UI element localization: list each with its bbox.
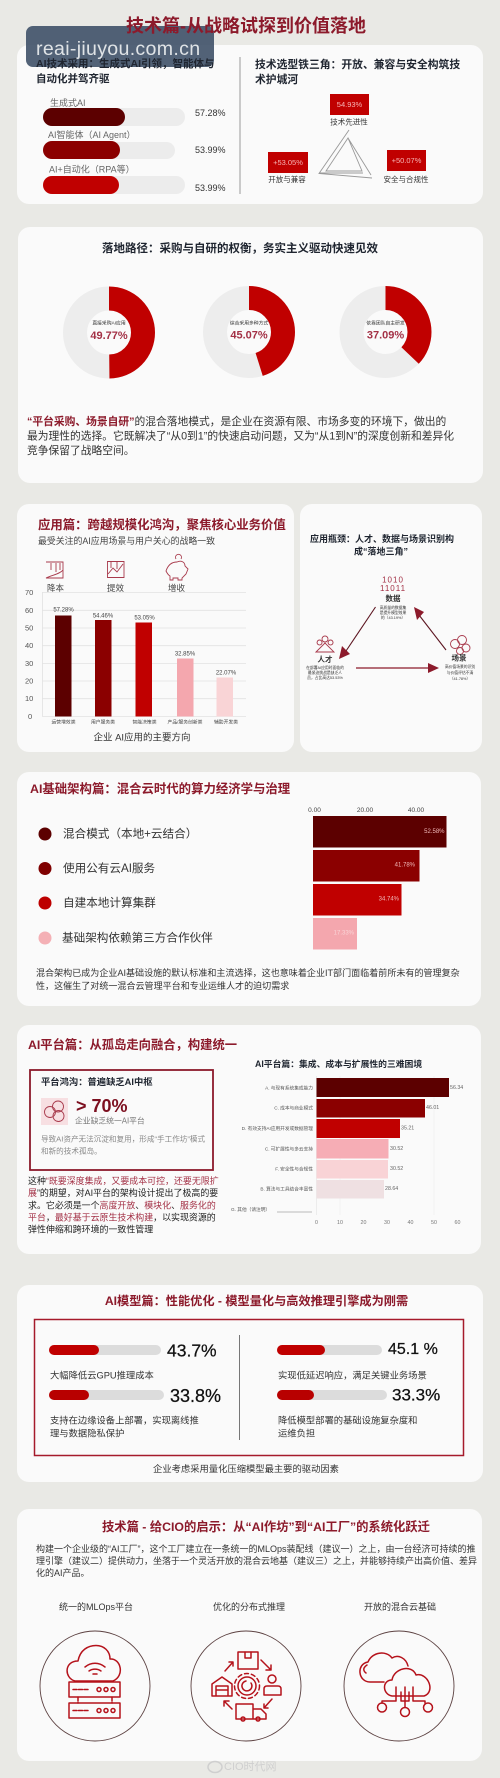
metric: GPU cost 43.7%: 大幅降低云GPU推理成本 [50, 1370, 154, 1380]
bar chart: platform challenges: 20 [361, 1220, 366, 1226]
donut: 49.77%: 直接采购AI应用 [92, 320, 126, 326]
heading: infrastructure: AI基础架构篇：混合云时代的算力经济学与治理 [30, 781, 291, 796]
bar chart: platform challenges: 56.34 [450, 1085, 463, 1091]
node: data: 高质量的数据集 [380, 605, 406, 610]
bar chart: application directions: 辅助开发类 [214, 718, 238, 726]
donut: 37.09% [352, 298, 420, 366]
triangle diagram: 开放与兼容 [268, 174, 306, 184]
text block: CIO summary: 化的AI产品。 [36, 1567, 90, 1578]
icon: piggy bank [166, 554, 188, 593]
bar chart: application directions: 用户服务类 [91, 718, 115, 726]
bar: generative AI [43, 97, 226, 126]
heading: model: AI模型篇：性能优化 - 模型量化与高效推理引擎成为刚需 [105, 1293, 408, 1308]
callout: platform gap [30, 1070, 213, 1170]
metric: reduce complexity 33.3% [277, 1386, 440, 1438]
metric: edge deployment 33.8%: 支持在边缘设备上部署，实现离线推 [50, 1416, 199, 1426]
bar chart: application directions: 32.85% [175, 652, 196, 658]
node: talent [306, 636, 344, 680]
bar chart: platform challenges: AI平台篇：集成、成本与扩展性的三难困境 [255, 1058, 422, 1069]
heading: adoption: 自动化并驾齐驱 [36, 72, 110, 85]
text block: platform summary: 平台 [28, 1212, 46, 1223]
node: data: 1010 [382, 576, 404, 584]
bar chart: platform challenges: 30.52 [390, 1146, 403, 1152]
heading: bottleneck: 成“落地三角” [354, 546, 408, 556]
triangle diagram: +53.05% [273, 158, 303, 167]
icon: efficiency: 提效 [107, 583, 125, 593]
panel: application bottleneck [300, 504, 482, 752]
callout: platform gap: > 70% [76, 1096, 128, 1116]
arrow: scenario to data [414, 607, 446, 650]
icon: cloud server [40, 1631, 150, 1741]
node: scenario: 场景 [452, 652, 467, 662]
bar: AI automation: 53.99% [195, 183, 226, 193]
icon: cost reduction [46, 562, 65, 593]
callout: model drivers [34, 1320, 464, 1456]
legend: infrastructure modes: 混合模式（本地+云结合） [63, 826, 197, 840]
heading: iron triangle: 术护城河 [255, 72, 298, 86]
bar chart: infrastructure share: 0.00 [308, 807, 321, 814]
triangle diagram [268, 94, 429, 184]
legend: infrastructure modes: 使用公有云AI服务 [63, 861, 156, 875]
heading: adoption: AI技术采用：生成式AI引领，智能体与 [36, 57, 214, 70]
bar chart: application directions [25, 588, 246, 744]
bar chart: application directions: 40 [25, 641, 33, 650]
node: data: 数据 [386, 593, 401, 603]
metric: GPU cost 43.7%: 43.7% [167, 1340, 217, 1360]
triangle diagram: 安全与合规性 [384, 174, 429, 184]
metric: low latency 45.1%: 45.1 % [388, 1341, 438, 1358]
node: talent: 人才 [318, 654, 333, 664]
callout: platform gap: 企业缺乏统一AI平台 [75, 1116, 145, 1126]
bar chart: infrastructure share: 40.00 [408, 807, 425, 814]
label: MLOps: 统一的MLOps平台 [59, 1601, 133, 1612]
heading: bottleneck: 应用瓶颈：人才、数据与场景识别构 [310, 534, 454, 544]
bar chart: platform challenges: F. 安全性与合规性 [275, 1166, 313, 1172]
bar chart: platform challenges: B. 算法与工具结合丰富性 [260, 1186, 313, 1192]
bar: AI automation [43, 164, 226, 194]
heading: platform: AI平台篇：从孤岛走向融合，构建统一 [28, 1037, 237, 1052]
triangle diagram: 技术先进性 [330, 116, 368, 126]
triangle diagram: 54.93% [337, 100, 363, 109]
bar chart: infrastructure share: 17.33% [334, 930, 355, 936]
bar chart: platform challenges: 30.52 [390, 1166, 403, 1172]
bar chart: application directions: 70 [25, 588, 33, 597]
metric: low latency 45.1% [277, 1341, 438, 1380]
watermark: site banner [26, 26, 214, 67]
text block: platform summary: 这种“既要深度集成，又要成本可控，还要无限扩 [28, 1176, 219, 1186]
node: scenario: 与价值评估不清 [447, 670, 473, 675]
bar chart: platform challenges: C. 可扩展性与多云支持 [265, 1146, 313, 1152]
text block: platform summary: 高度开放、模块化、服务化的 [100, 1200, 216, 1210]
bar chart: infrastructure share [308, 807, 446, 950]
bar chart: application directions: 53.05% [134, 616, 155, 622]
legend: infrastructure modes: 基础架构依赖第三方合作伙伴 [62, 930, 213, 944]
caption: model: 企业考虑采用量化压缩模型最主要的驱动因素 [153, 1463, 339, 1474]
text block: platform summary: ，最好基于云原生技术构建，以实现资源的 [46, 1213, 216, 1223]
donut: 49.77%: 49.77% [90, 330, 128, 342]
node: data [380, 576, 406, 620]
heading: CIO takeaways: 技术篇 - 给CIO的启示：从“AI作坊”到“AI工厂”的系统化跃迁 [102, 1519, 430, 1534]
heading: landing path: 落地路径：采购与自研的权衡，务实主义驱动快速见效 [102, 241, 378, 255]
bar: AI agent: 53.99% [195, 145, 226, 155]
bar chart: platform challenges: 10 [337, 1220, 343, 1226]
metric: edge deployment 33.8% [49, 1386, 221, 1438]
text block: platform summary: ”的期望，对AI平台的架构设计提出了极高的要 [37, 1188, 218, 1198]
metric: low latency 45.1%: 实现低延迟响应，满足关键业务场景 [278, 1370, 427, 1380]
node: scenario [445, 636, 475, 681]
text block: landing summary: 竞争保留了战略空间。 [27, 444, 135, 457]
bar chart: platform challenges: D. 有效支持AI应用开发或数据管理 [242, 1125, 313, 1132]
bar chart: application directions: 30 [25, 659, 33, 668]
callout: platform gap: 和新的技术孤岛。 [41, 1145, 102, 1155]
metric: GPU cost 43.7% [49, 1340, 217, 1380]
panel: AI infrastructure [17, 772, 481, 1006]
donut: 45.07%: 综合采用多种方式 [230, 320, 268, 326]
text block: platform summary: 弹性伸缩和跨环境的一致性管理 [28, 1224, 153, 1235]
bar chart: application directions: 产品/服务创新类 [168, 718, 203, 726]
arrow: talent to scenario [356, 663, 439, 673]
bar chart: platform challenges: 28.64 [385, 1186, 398, 1192]
legend: infrastructure modes [38, 826, 213, 944]
icon: hybrid cloud [344, 1631, 454, 1741]
bar chart: infrastructure share: 41.78% [395, 862, 416, 868]
icon: efficiency [107, 562, 125, 593]
bar chart: application directions: 智能决策类 [132, 718, 157, 726]
panel: landing path [18, 227, 483, 483]
text block: infrastructure summary: 性，这催生了对统一混合云管理平台和专业运维人才的迫切需求 [36, 980, 289, 991]
text block: platform summary: 求。它必须是一个 [28, 1199, 100, 1210]
callout: platform gap: 导致AI资产无法沉淀和复用，形成“手工作坊”模式 [41, 1134, 205, 1144]
bar chart: platform challenges: C. 成本与商业模式 [274, 1104, 313, 1112]
metric: edge deployment 33.8%: 理与数据隐私保护 [50, 1428, 124, 1438]
node: data: 11011 [380, 584, 406, 593]
label: hybrid cloud: 开放的混合云基础 [364, 1601, 436, 1612]
donut: 49.77% [75, 298, 143, 366]
legend: infrastructure modes: 自建本地计算集群 [63, 896, 156, 910]
node: scenario: （41.78%） [450, 676, 470, 681]
bar: AI agent [43, 129, 226, 159]
bar: AI agent: AI智能体（AI Agent） [48, 129, 136, 140]
node: talent: 最紧迫挑战是缺乏人 [308, 670, 342, 675]
bar chart: application directions: 60 [25, 606, 33, 615]
donut: 37.09%: 37.09% [367, 330, 404, 342]
text block: infrastructure summary: 混合架构已成为企业AI基础设施的默认标准和主流选择，这也意味着企业IT部门面临着前所未有的管理复杂 [36, 968, 460, 978]
bar chart: application directions: 20 [25, 676, 33, 686]
bar chart: platform challenges: 46.01 [426, 1105, 439, 1111]
metric: reduce complexity 33.3%: 运维负担 [278, 1428, 315, 1438]
panel: AI model [17, 1285, 483, 1482]
node: data: 的（43.19%） [381, 615, 405, 620]
donut: 45.07% [215, 298, 283, 366]
text block: landing summary: “平台采购、场景自研”的混合落地模式，是企业在资源有限、市场多变的环境下，做出的 [27, 416, 446, 428]
bar chart: application directions: 54.46% [93, 614, 114, 620]
metric: reduce complexity 33.3%: 33.3% [392, 1386, 440, 1404]
bar chart: platform challenges: G. 其他（请注明） [231, 1206, 270, 1213]
bar chart: application directions: 0 [28, 712, 32, 721]
icon: distributed logistics [191, 1631, 301, 1741]
watermark: site banner: reai-jiuyou.com.cn [36, 38, 200, 60]
text block: platform summary: 展 [28, 1188, 37, 1198]
bar chart: platform challenges: 30 [384, 1220, 390, 1226]
panel: CIO takeaways [17, 1509, 482, 1761]
subheading: application: 最受关注的AI应用场景与用户关心的战略一致 [38, 535, 215, 546]
metric: edge deployment 33.8%: 33.8% [170, 1386, 221, 1406]
panel: AI platform [17, 1025, 481, 1254]
bar: generative AI: 生成式AI [50, 97, 86, 108]
bar chart: application directions: 57.28% [53, 608, 74, 614]
text block: CIO summary: 理引擎（建议二）提供动力，坐落于一个灵活开放的混合云地基（建议三）之上，并能够持续产出高价值、差异 [36, 1555, 477, 1566]
bar chart: application directions: 22.07% [216, 670, 237, 676]
bar chart: application directions: 企业 AI应用的主要方向 [93, 732, 191, 744]
bar chart: platform challenges: 35.21 [401, 1126, 414, 1132]
title: 技术篇-从战略试探到价值落地 [126, 15, 366, 36]
panel: adoption and triangle [17, 45, 483, 204]
arrow: data to talent [339, 607, 376, 659]
bar chart: platform challenges: 40 [408, 1220, 413, 1226]
icon: piggy bank: 增收 [168, 583, 186, 593]
panel: application chart [17, 504, 294, 752]
bar chart: platform challenges: 50 [431, 1220, 437, 1226]
node: talent: 在部署AI应用时面临的 [306, 665, 344, 670]
donut: 37.09%: 依靠团队自主研发 [366, 320, 405, 326]
label: inference: 优化的分布式推理 [213, 1601, 285, 1612]
bar chart: infrastructure share: 20.00 [357, 807, 374, 814]
bar: AI automation: AI+自动化（RPA等） [49, 164, 135, 174]
bar chart: platform challenges: 0 [315, 1220, 318, 1226]
bar chart: infrastructure share: 34.74% [379, 896, 400, 902]
text block: landing summary: 最为理性的选择。它既解决了“从0到1”的快速启动问题，又为“从1到N”的深度创新和差异化 [27, 430, 454, 442]
bar chart: application directions: 运营增效类 [52, 718, 76, 726]
triangle diagram: +50.07% [392, 156, 422, 165]
bar chart: platform challenges [231, 1058, 463, 1226]
watermark: weibo credit: CIO时代网 [224, 1760, 277, 1773]
bar chart: infrastructure share: 52.58% [424, 829, 445, 835]
donut: 45.07%: 45.07% [230, 330, 268, 342]
bar: generative AI: 57.28% [195, 108, 226, 118]
bar chart: application directions: 50 [25, 624, 33, 632]
node: data: 是提升模型效果 [380, 610, 406, 615]
heading: application: 应用篇：跨越规模化鸿沟，聚焦核心业务价值 [38, 517, 286, 532]
bar chart: platform challenges: A. 与现有系统集成能力 [265, 1084, 313, 1092]
node: scenario: 高价值场景的识别 [445, 664, 475, 669]
node: talent: 员，占比高达53.53% [307, 675, 343, 680]
metric: reduce complexity 33.3%: 降低模型部署的基础设施复杂度和 [278, 1416, 417, 1426]
bar chart: application directions: 10 [25, 694, 33, 703]
icon: cost reduction: 降本 [47, 583, 65, 593]
text block: CIO summary: 构建一个企业级的“AI工厂”，这个工厂建立在一条统一的MLOps装配线（建议一）之上，由一台经济可持续的推 [36, 1544, 476, 1554]
heading: iron triangle: 技术选型铁三角：开放、兼容与安全构筑技 [255, 59, 460, 71]
bar chart: platform challenges: 60 [455, 1220, 460, 1226]
callout: platform gap: 平台鸿沟：普遍缺乏AI中枢 [41, 1076, 153, 1087]
